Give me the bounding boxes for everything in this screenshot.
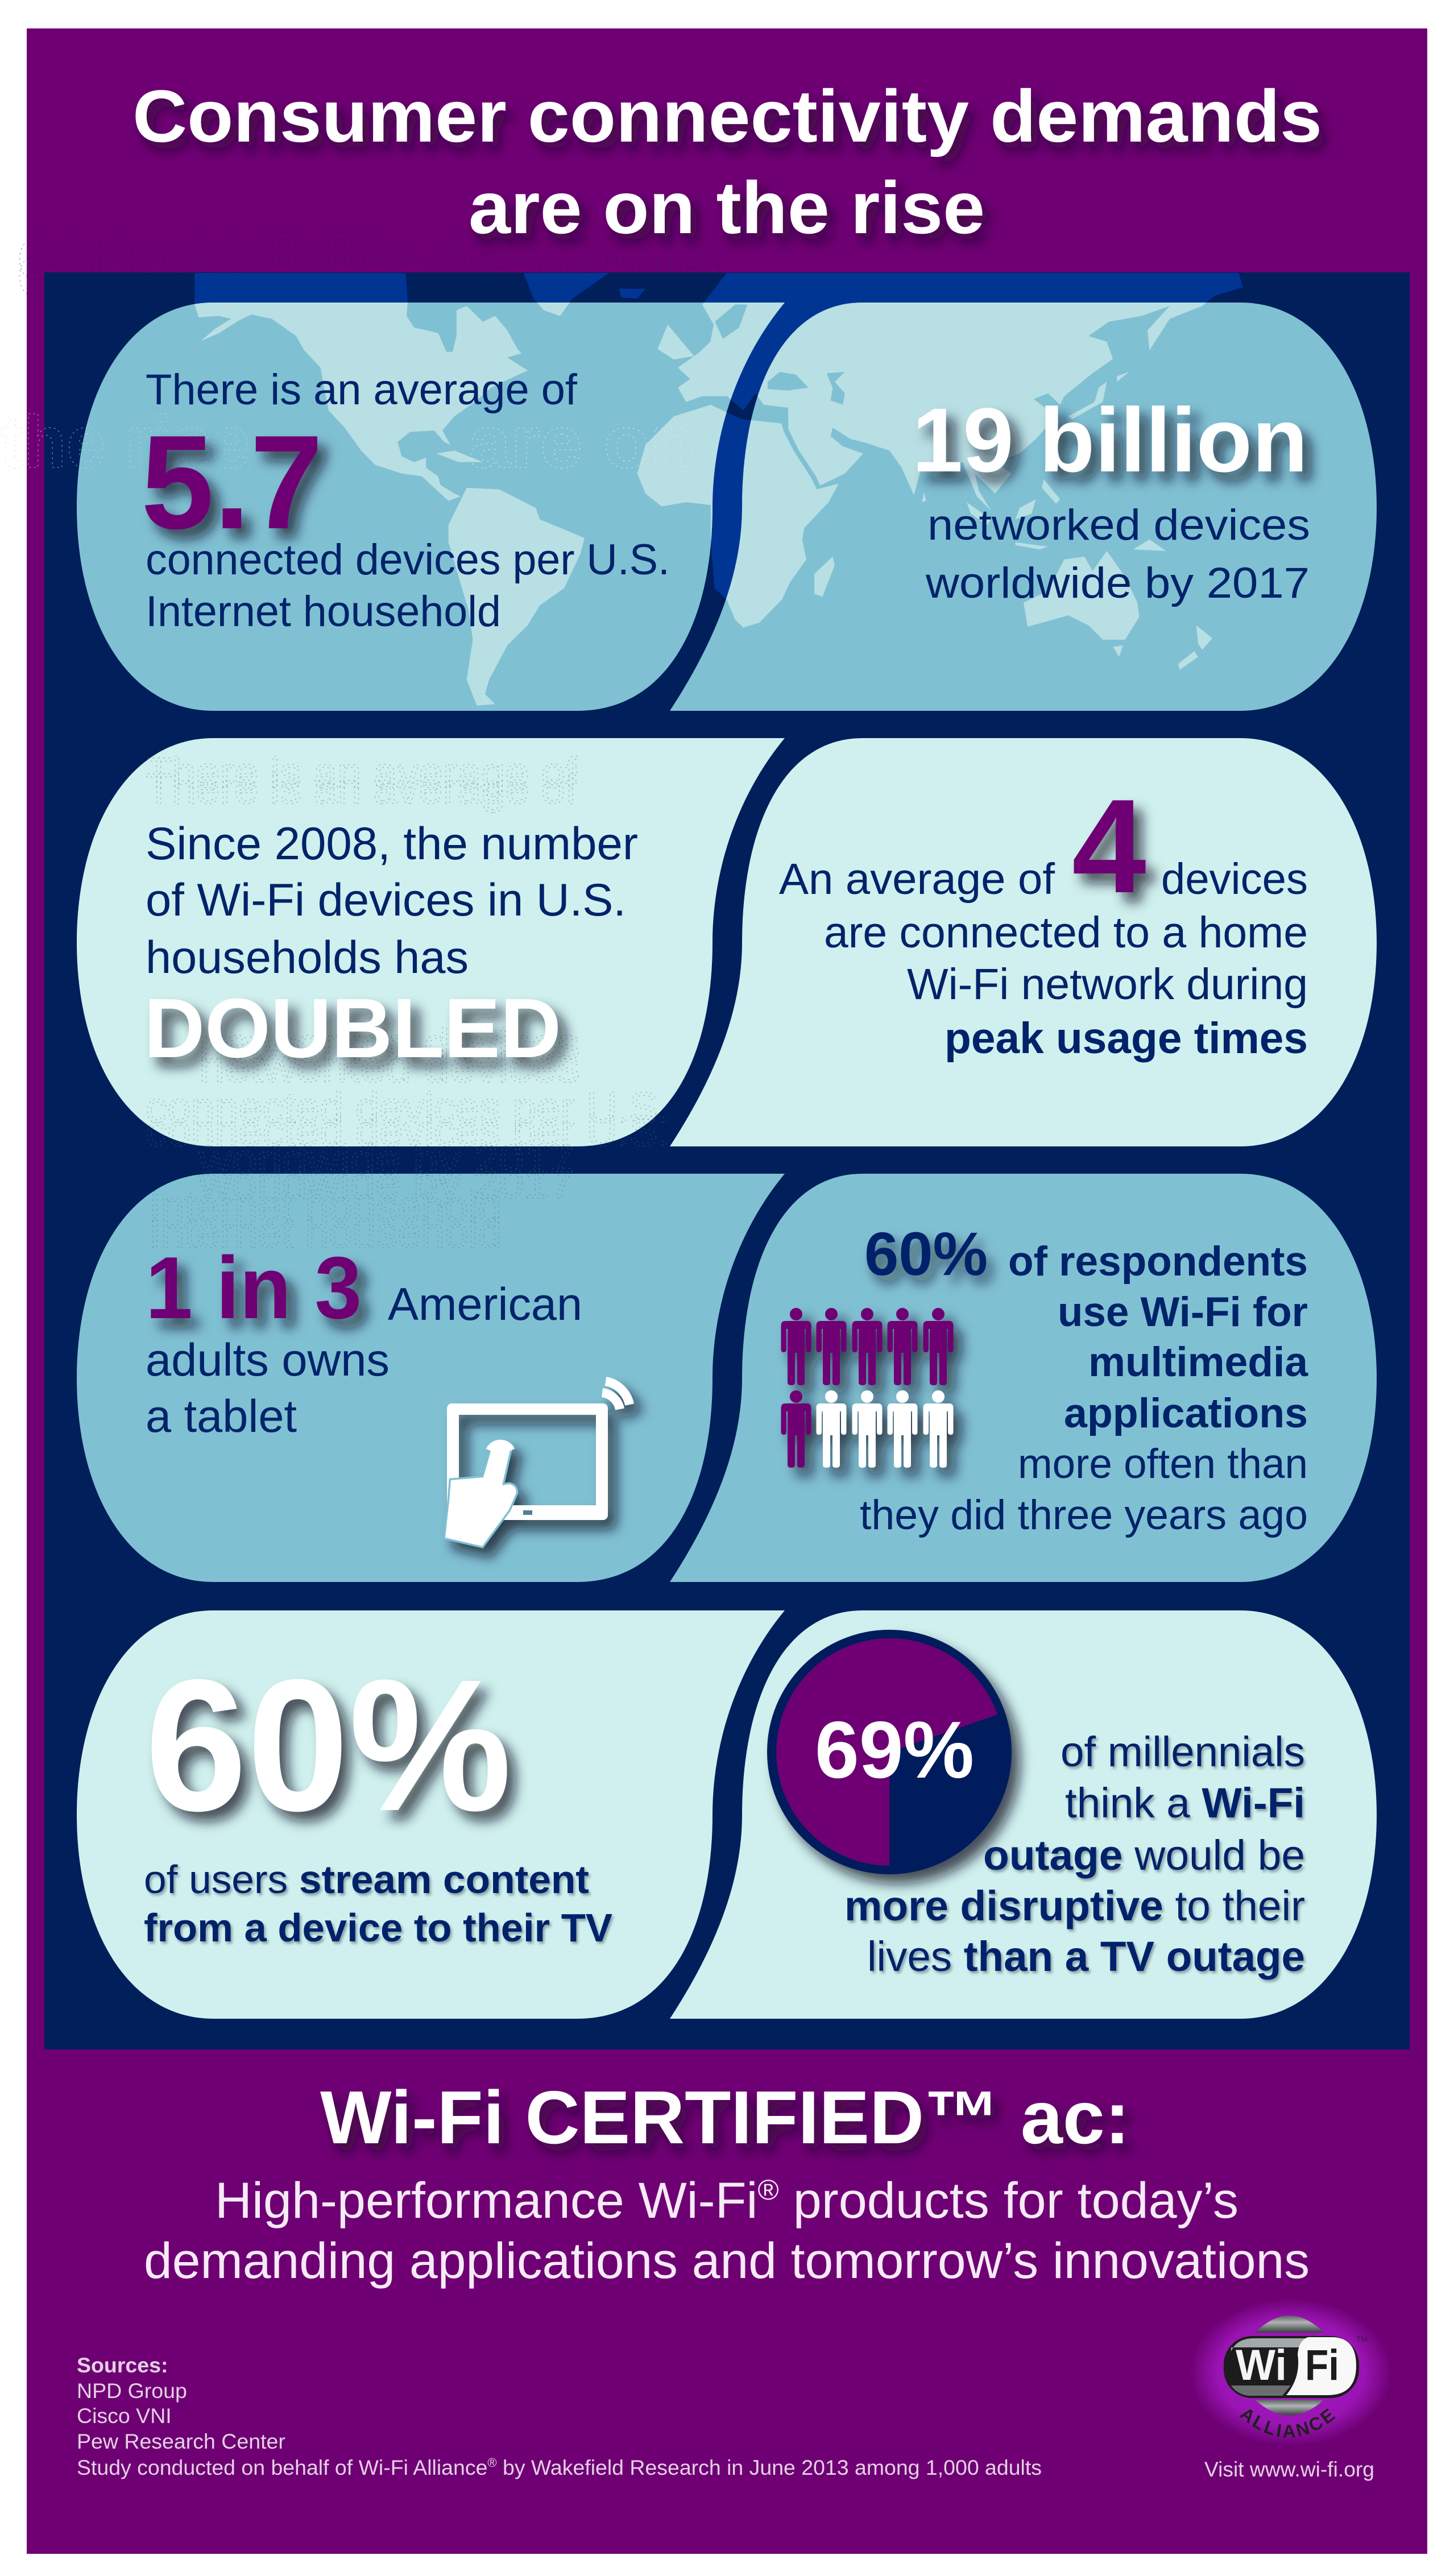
text: 4 devices: are connected to a home bbox=[824, 908, 1308, 957]
ghost artefact text, row 2: networked devices bbox=[199, 1043, 580, 1092]
big number 4: 4 bbox=[1072, 771, 1146, 921]
icon: tablet with hand bbox=[445, 1381, 629, 1546]
text: 5.7 devices: Internet household bbox=[146, 587, 501, 636]
sources: Study conducted on behalf of Wi-Fi Alliance bbox=[77, 2455, 488, 2479]
ghost artefact text, row 3: Internet household bbox=[149, 1183, 502, 1231]
big number 5.7: 5.7 bbox=[141, 407, 323, 557]
ghost artefact text, row 3: worldwide by 2017 bbox=[198, 1136, 574, 1185]
navy main panel bbox=[44, 272, 1410, 2049]
text: 1 in 3: American bbox=[388, 1279, 582, 1330]
text: 4 devices: An average of bbox=[779, 855, 1055, 904]
sources: ® bbox=[487, 2455, 497, 2470]
row 2 panels bbox=[77, 738, 1377, 1146]
logo: Wi-Fi Alliance: ALLIANCE bbox=[1239, 2408, 1335, 2438]
text: 5.7 devices: the rise bbox=[0, 400, 250, 483]
panel: doubled bbox=[77, 738, 785, 1146]
title: Consumer connectivity demands bbox=[132, 74, 1322, 158]
icon: 10 people pictogram bbox=[781, 1308, 953, 1468]
logo: Wi-Fi Alliance bbox=[1193, 2301, 1389, 2444]
title: are on the rise bbox=[469, 166, 985, 249]
text: 5.7 devices bbox=[0, 366, 696, 636]
text: 60% of users: of users stream content bbox=[144, 1857, 589, 1902]
text: 5.7 devices: There is an average of bbox=[146, 366, 578, 414]
text: 1 in 3 bbox=[146, 1239, 582, 1442]
ghost artefact text, row 2: networked devices bbox=[199, 1020, 580, 1068]
footer subheading: products for today’s bbox=[779, 2172, 1238, 2229]
ghost artefact text, row 2: There is an average of bbox=[146, 749, 578, 797]
ghost artefact text, row 2 bbox=[146, 749, 670, 1156]
text: millennials: more disruptive to their bbox=[844, 1882, 1305, 1929]
text: millennials: think a Wi-Fi bbox=[1065, 1779, 1305, 1827]
footer heading: Wi-Fi CERTIFIED™ ac: bbox=[320, 2076, 1130, 2159]
logo: Wi-Fi Alliance: TM bbox=[1356, 2334, 1368, 2343]
world map seen on navy bbox=[194, 273, 1243, 599]
sources: by Wakefield Research in June 2013 among 1,000 adults bbox=[497, 2455, 1042, 2479]
panel: 19 billion bbox=[670, 303, 1377, 711]
text: 60% respondents: multimedia bbox=[1088, 1339, 1308, 1385]
text: 4 devices: devices bbox=[1161, 855, 1308, 904]
logo: Wi-Fi Alliance: Fi bbox=[1305, 2341, 1339, 2389]
big number 19 billion: 19 billion bbox=[912, 389, 1308, 491]
text: 5.7 devices: are on bbox=[469, 400, 696, 483]
row 1 panels bbox=[77, 303, 1377, 711]
text: doubled: households has bbox=[146, 932, 469, 983]
ghost artefact text, row 2: connected devices per U.S. bbox=[146, 1084, 670, 1132]
big 60%: 60% bbox=[145, 1640, 512, 1850]
sources: NPD Group bbox=[77, 2379, 187, 2403]
panel: 5.7 devices bbox=[77, 303, 785, 711]
row 3 panels bbox=[77, 1174, 1377, 1582]
text: millennials bbox=[844, 1728, 1305, 1980]
ghost artefact text, row 3: Internet household bbox=[149, 1209, 502, 1257]
sources: Cisco VNI bbox=[77, 2404, 172, 2428]
sources: Sources: bbox=[77, 2353, 168, 2377]
panel: millennials bbox=[670, 1610, 1377, 2019]
text: 19 billion: worldwide by 2017 bbox=[925, 559, 1310, 607]
text: 60% of users bbox=[144, 1640, 612, 1950]
world map inside cards bbox=[194, 273, 1243, 706]
heading 60%: 60% bbox=[864, 1219, 988, 1288]
text: 1 in 3: a tablet bbox=[146, 1391, 297, 1442]
DOUBLED emphasis: DOUBLED bbox=[144, 981, 561, 1075]
text: doubled: of Wi-Fi devices in U.S. bbox=[146, 875, 626, 926]
text: 60% respondents bbox=[860, 1219, 1308, 1538]
text: millennials: lives than a TV outage bbox=[867, 1933, 1305, 1980]
panel: 4 devices bbox=[670, 738, 1377, 1146]
sources bbox=[77, 2353, 1042, 2479]
pie label: 69% bbox=[815, 1705, 974, 1795]
ghost artefact text, row 2: There is an average of bbox=[146, 765, 578, 813]
text: doubled: Since 2008, the number bbox=[146, 818, 638, 869]
text: doubled bbox=[144, 818, 638, 1075]
text: 19 billion: networked devices bbox=[927, 501, 1310, 549]
text: 4 devices bbox=[779, 771, 1308, 1063]
text: 60% respondents: they did three years ago bbox=[860, 1492, 1308, 1538]
panel: tablet bbox=[77, 1174, 785, 1582]
pie chart 69% bbox=[767, 1630, 1012, 1874]
text: millennials: of millennials bbox=[1061, 1728, 1305, 1775]
ghost artefact text in header: connectivity demands bbox=[17, 212, 722, 295]
row 4 panels bbox=[77, 1610, 1377, 2019]
ghost artefact text, row 3 bbox=[149, 1136, 574, 1257]
footer subheading bbox=[144, 2172, 1310, 2289]
text: millennials: outage would be bbox=[983, 1832, 1305, 1879]
text: 60% respondents: use Wi-Fi for bbox=[1058, 1289, 1308, 1335]
sources: Pew Research Center bbox=[77, 2429, 285, 2453]
text: 60% respondents: applications bbox=[1064, 1390, 1308, 1436]
text: 60% respondents: of respondents bbox=[1008, 1239, 1308, 1285]
text: 60% respondents: more often than bbox=[1018, 1441, 1308, 1487]
text: 4 devices: Wi-Fi network during bbox=[907, 960, 1308, 1009]
footer subheading: High-performance Wi-Fi bbox=[215, 2172, 752, 2229]
ghost artefact text, row 3: worldwide by 2017 bbox=[198, 1159, 574, 1208]
footer subheading: ® bbox=[758, 2174, 779, 2206]
panel: stream content bbox=[77, 1610, 785, 2019]
ghost artefact text, row 2: connected devices per U.S. bbox=[146, 1107, 670, 1156]
title bbox=[132, 74, 1322, 249]
footer subheading: demanding applications and tomorrow’s innovations bbox=[144, 2232, 1310, 2289]
text: 5.7 devices: connected devices per U.S. bbox=[146, 536, 670, 584]
text: 4 devices: peak usage times bbox=[945, 1014, 1308, 1063]
logo: Wi-Fi Alliance: Wi bbox=[1236, 2341, 1287, 2389]
text: 60% of users: from a device to their TV bbox=[144, 1906, 612, 1950]
text: 19 billion bbox=[912, 389, 1310, 607]
ghost text in the band above cards: connectivity demands bbox=[17, 229, 722, 312]
text: 1 in 3: adults owns bbox=[146, 1335, 390, 1386]
visit link: Visit www.wi-fi.org bbox=[1204, 2458, 1374, 2481]
big 1 in 3: 1 in 3 bbox=[146, 1239, 362, 1337]
panel: multimedia bbox=[670, 1174, 1377, 1582]
